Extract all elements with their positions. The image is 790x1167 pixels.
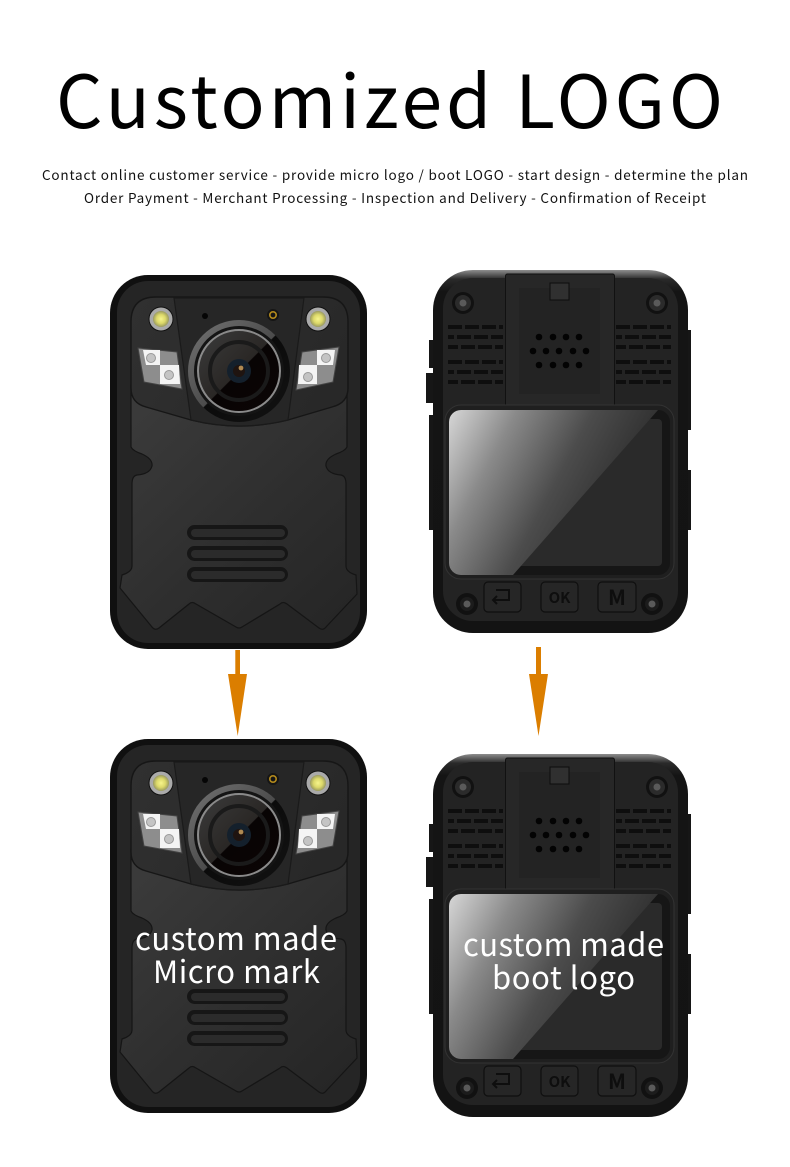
camera front body <box>110 275 367 649</box>
camera front, customised with micro mark <box>110 739 367 1113</box>
camera front main contour <box>120 385 357 629</box>
M button: M <box>608 582 626 612</box>
camera lens <box>188 320 290 422</box>
OK button <box>541 582 578 612</box>
boot logo caption: custom made <box>463 920 664 965</box>
micro mark caption <box>135 914 337 992</box>
side buttons <box>426 330 691 530</box>
M button <box>598 582 636 612</box>
camera back, original <box>426 270 691 633</box>
white LED left <box>149 307 173 331</box>
micro mark caption: Micro mark <box>153 947 320 992</box>
boot logo caption: boot logo <box>492 953 635 998</box>
boot logo caption <box>463 920 664 998</box>
bottom left screw <box>456 593 478 615</box>
OK button: OK <box>549 587 571 608</box>
screen <box>445 405 674 579</box>
grip slots <box>187 525 288 582</box>
right arrow <box>529 647 548 736</box>
right vent grille <box>616 327 671 382</box>
process description: Order Payment - Merchant Processing - Inspection and Delivery - Confirmation of Receipt <box>84 187 706 207</box>
camera front top cluster <box>131 297 348 426</box>
top left screw <box>452 292 474 314</box>
speaker holes <box>530 334 589 368</box>
light sensor <box>267 309 279 321</box>
title: Customized LOGO <box>56 44 723 150</box>
process description <box>42 164 748 207</box>
camera front, original <box>110 275 367 649</box>
camera front lens housing <box>174 298 304 426</box>
IR window right <box>296 347 339 390</box>
process description: Contact online customer service - provide micro logo / boot LOGO - start design - determine the plan <box>42 164 748 184</box>
left vent grille <box>448 327 503 382</box>
camera back body <box>433 270 688 633</box>
microphone hole <box>202 313 208 319</box>
back button <box>484 582 521 612</box>
left arrow <box>228 650 247 736</box>
top right screw <box>646 292 668 314</box>
white LED right <box>306 307 330 331</box>
IR window left <box>138 348 182 389</box>
bottom right screw <box>641 593 663 615</box>
micro mark caption: custom made <box>135 914 337 959</box>
camera back, customised with boot logo <box>426 754 691 1117</box>
belt clip <box>506 274 614 406</box>
